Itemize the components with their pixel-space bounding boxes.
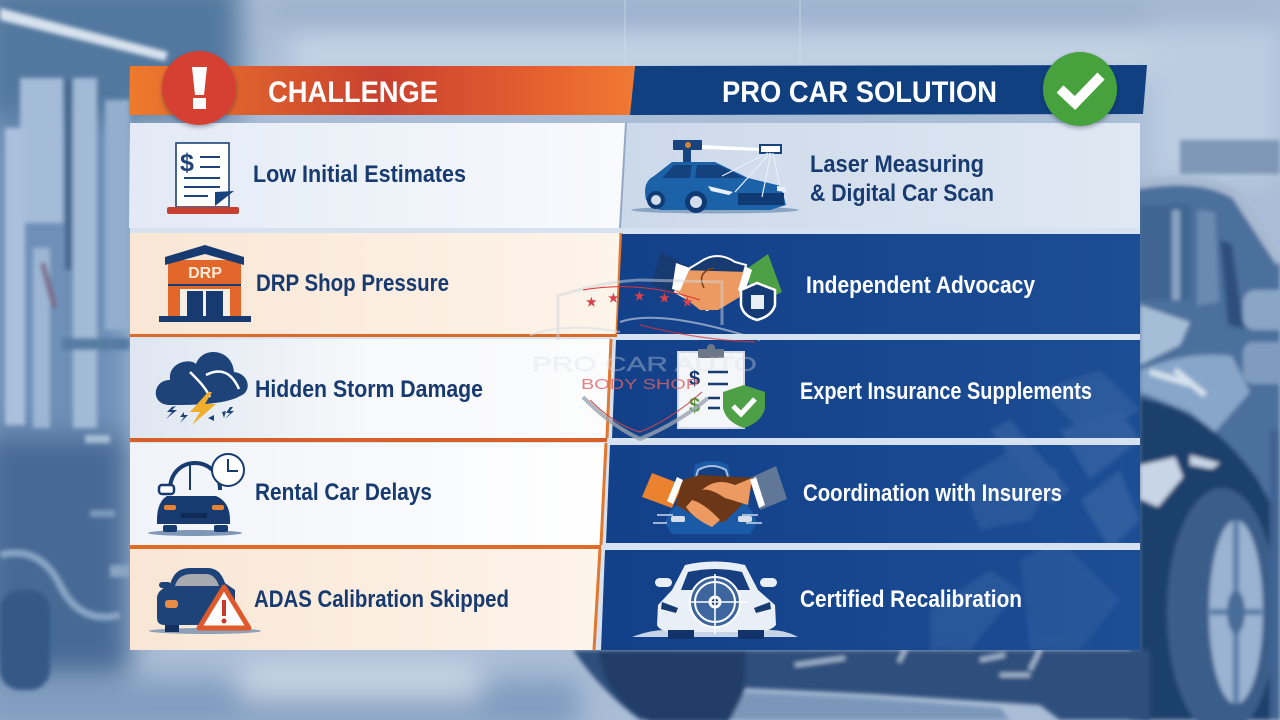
icon: drp shop: DRP [188, 265, 222, 282]
watermark: pro car body shop logo [530, 280, 760, 439]
panel: expert insurance supplements [612, 340, 1140, 438]
stars: ★ [659, 291, 670, 305]
panel: challenge rows [129, 123, 626, 650]
icon: drp shop [159, 245, 251, 322]
heading: challenge: CHALLENGE [268, 76, 438, 109]
label: low initial estimates: Low Initial Estimates [253, 161, 466, 188]
panel: coordination with insurers [606, 445, 1140, 543]
icon: laser scanned car [631, 140, 799, 214]
stars: ★ [586, 295, 597, 309]
label: laser measuring and digital car scan [810, 151, 994, 207]
icon: car with calibration target [632, 562, 798, 639]
label: drp shop pressure: DRP Shop Pressure [256, 270, 449, 297]
left garage columns [0, 8, 168, 690]
stars: ★ [634, 289, 645, 303]
icon: clipboard with green shield [678, 344, 765, 428]
icon: estimate document: $ [180, 149, 194, 177]
panel: adas calibration skipped [130, 549, 600, 650]
panel: laser measuring [620, 123, 1140, 228]
table backing [130, 123, 1140, 650]
logo subtitle: BODY SHOP [581, 376, 699, 393]
icon: handshake with shield [652, 252, 782, 320]
panel: certified recalibration [601, 550, 1140, 650]
panel: solution rows [601, 123, 1140, 650]
icon: car with clock [148, 454, 244, 536]
stars: ★ [682, 295, 693, 309]
icon: check badge [1043, 52, 1117, 126]
label: laser measuring and digital car scan: & Digital Car Scan [810, 180, 994, 207]
faint vertical lines on far wall [625, 0, 800, 66]
header: pro car solution [630, 52, 1147, 126]
header: challenge [129, 51, 635, 125]
icon: estimate document [167, 143, 239, 214]
stars: ★ [608, 291, 619, 305]
icon: clipboard with green shield: $ [689, 395, 700, 417]
panel: hidden storm damage [130, 339, 611, 442]
logo wordmark: PRO CAR AUTO [532, 354, 757, 376]
panel: independent advocacy [617, 234, 1140, 334]
panel: rental car delays [130, 443, 606, 549]
label: hidden storm damage: Hidden Storm Damage [255, 376, 483, 403]
icon: clipboard with green shield: $ [689, 368, 700, 390]
panel: low initial estimates [129, 123, 626, 228]
label: adas calibration skipped: ADAS Calibration Skipped [254, 586, 509, 613]
icon: storm cloud [156, 352, 248, 425]
icon: car with warning triangle [149, 568, 261, 634]
label: certified recalibration: Certified Recalibration [800, 586, 1022, 613]
label: coordination with insurers: Coordination with Insurers [803, 480, 1062, 507]
icon: exclamation badge [162, 51, 236, 125]
icon: handshake over car [642, 461, 787, 534]
right damaged car [1130, 140, 1280, 720]
label: independent advocacy: Independent Advocacy [806, 272, 1036, 299]
bottom car underside [573, 650, 1150, 720]
label: laser measuring and digital car scan: Laser Measuring [810, 151, 984, 178]
heading: pro car solution: PRO CAR SOLUTION [722, 76, 997, 109]
label: rental car delays: Rental Car Delays [255, 479, 432, 506]
stars [586, 289, 693, 309]
label: expert insurance supplements: Expert Insurance Supplements [800, 378, 1092, 405]
panel: drp shop pressure [130, 233, 621, 337]
